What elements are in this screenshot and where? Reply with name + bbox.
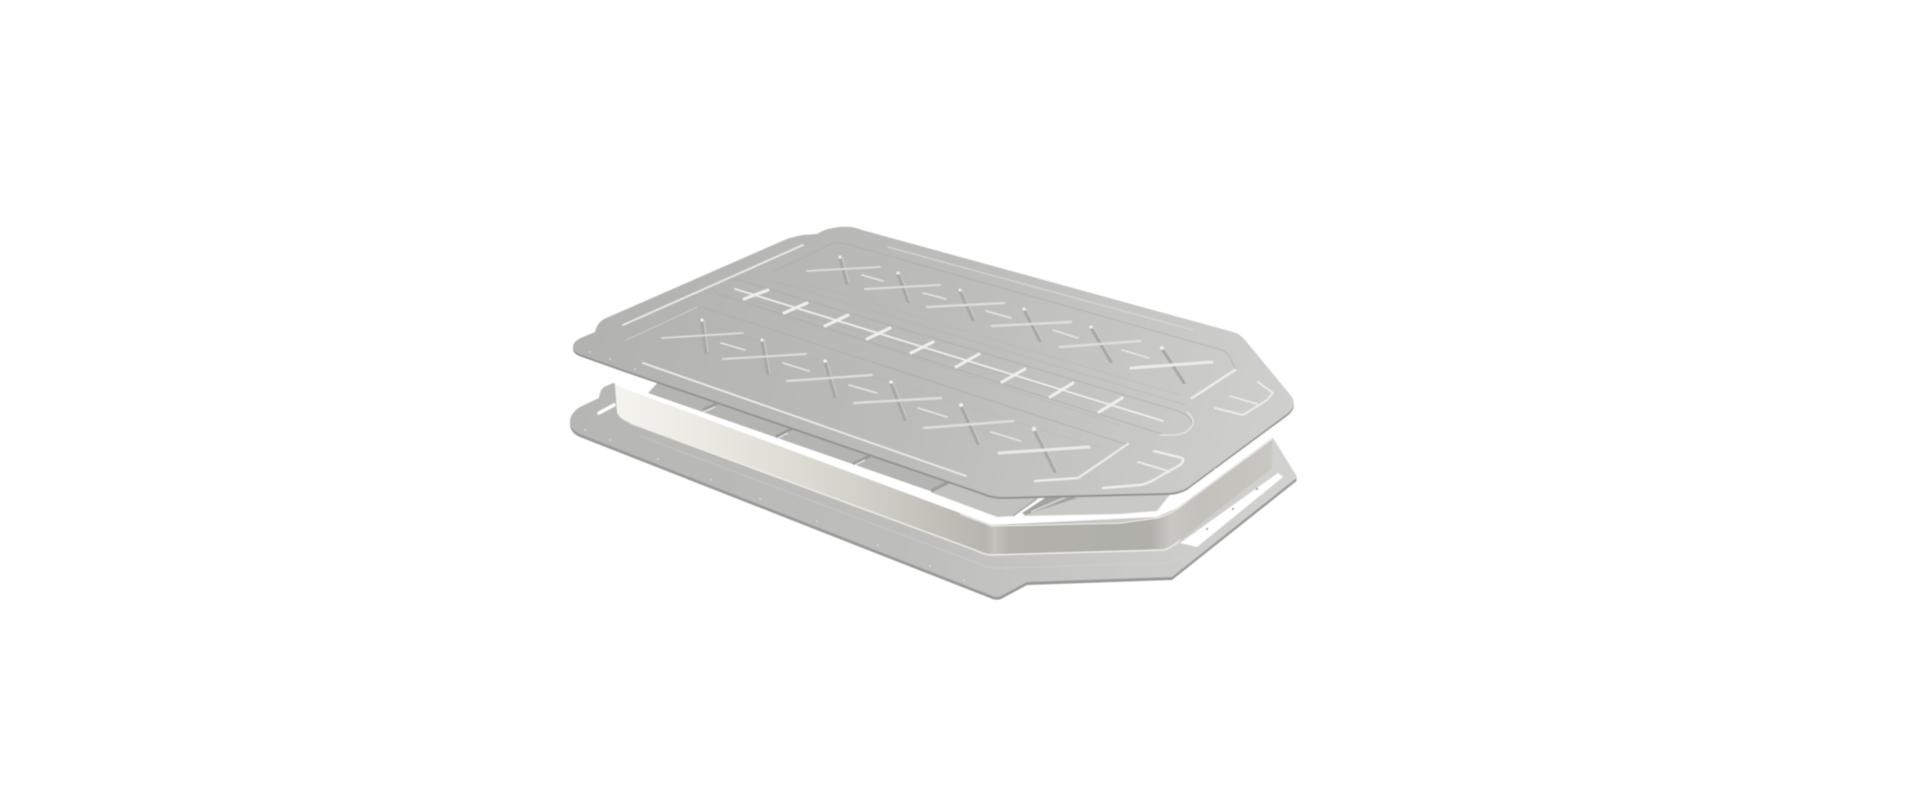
tray mounting strip (1180, 473, 1283, 547)
centre rib (735, 289, 1163, 421)
long edge ribs (623, 245, 1193, 476)
upper plate (573, 227, 1294, 499)
tray emboss lines (640, 436, 1193, 568)
dark batten cluster (1022, 495, 1077, 515)
diagonal rib highlights (704, 257, 1186, 471)
tray rivets (584, 429, 965, 581)
diagonal cross ribs (702, 257, 1184, 471)
tray underside edge (570, 386, 1297, 600)
strip holes (1206, 488, 1258, 530)
cross bars (703, 402, 949, 491)
internal cross members (648, 380, 1172, 517)
enclosure assembly (570, 227, 1297, 600)
plate rivets (589, 325, 1281, 470)
inner band (648, 380, 955, 491)
far wall (1022, 492, 1172, 516)
white opening between plate and wall (615, 370, 1273, 525)
centre crossbars (744, 290, 1122, 412)
wall upper highlight (960, 439, 1272, 526)
lower tray (570, 383, 1297, 600)
tray flange (570, 383, 1297, 597)
rib end dots (700, 255, 1164, 431)
plate top surface (573, 227, 1294, 497)
inner light floor (930, 482, 1040, 517)
tray slot (599, 405, 614, 413)
horizontal cross ribs (662, 267, 1212, 453)
plate emboss outlines (625, 243, 1235, 481)
wall lower highlight (630, 423, 1180, 555)
short dash ribs (721, 275, 1149, 441)
chamfer ribs (1035, 370, 1273, 488)
plate underside edge (573, 229, 1294, 499)
tray wall (615, 385, 1272, 555)
